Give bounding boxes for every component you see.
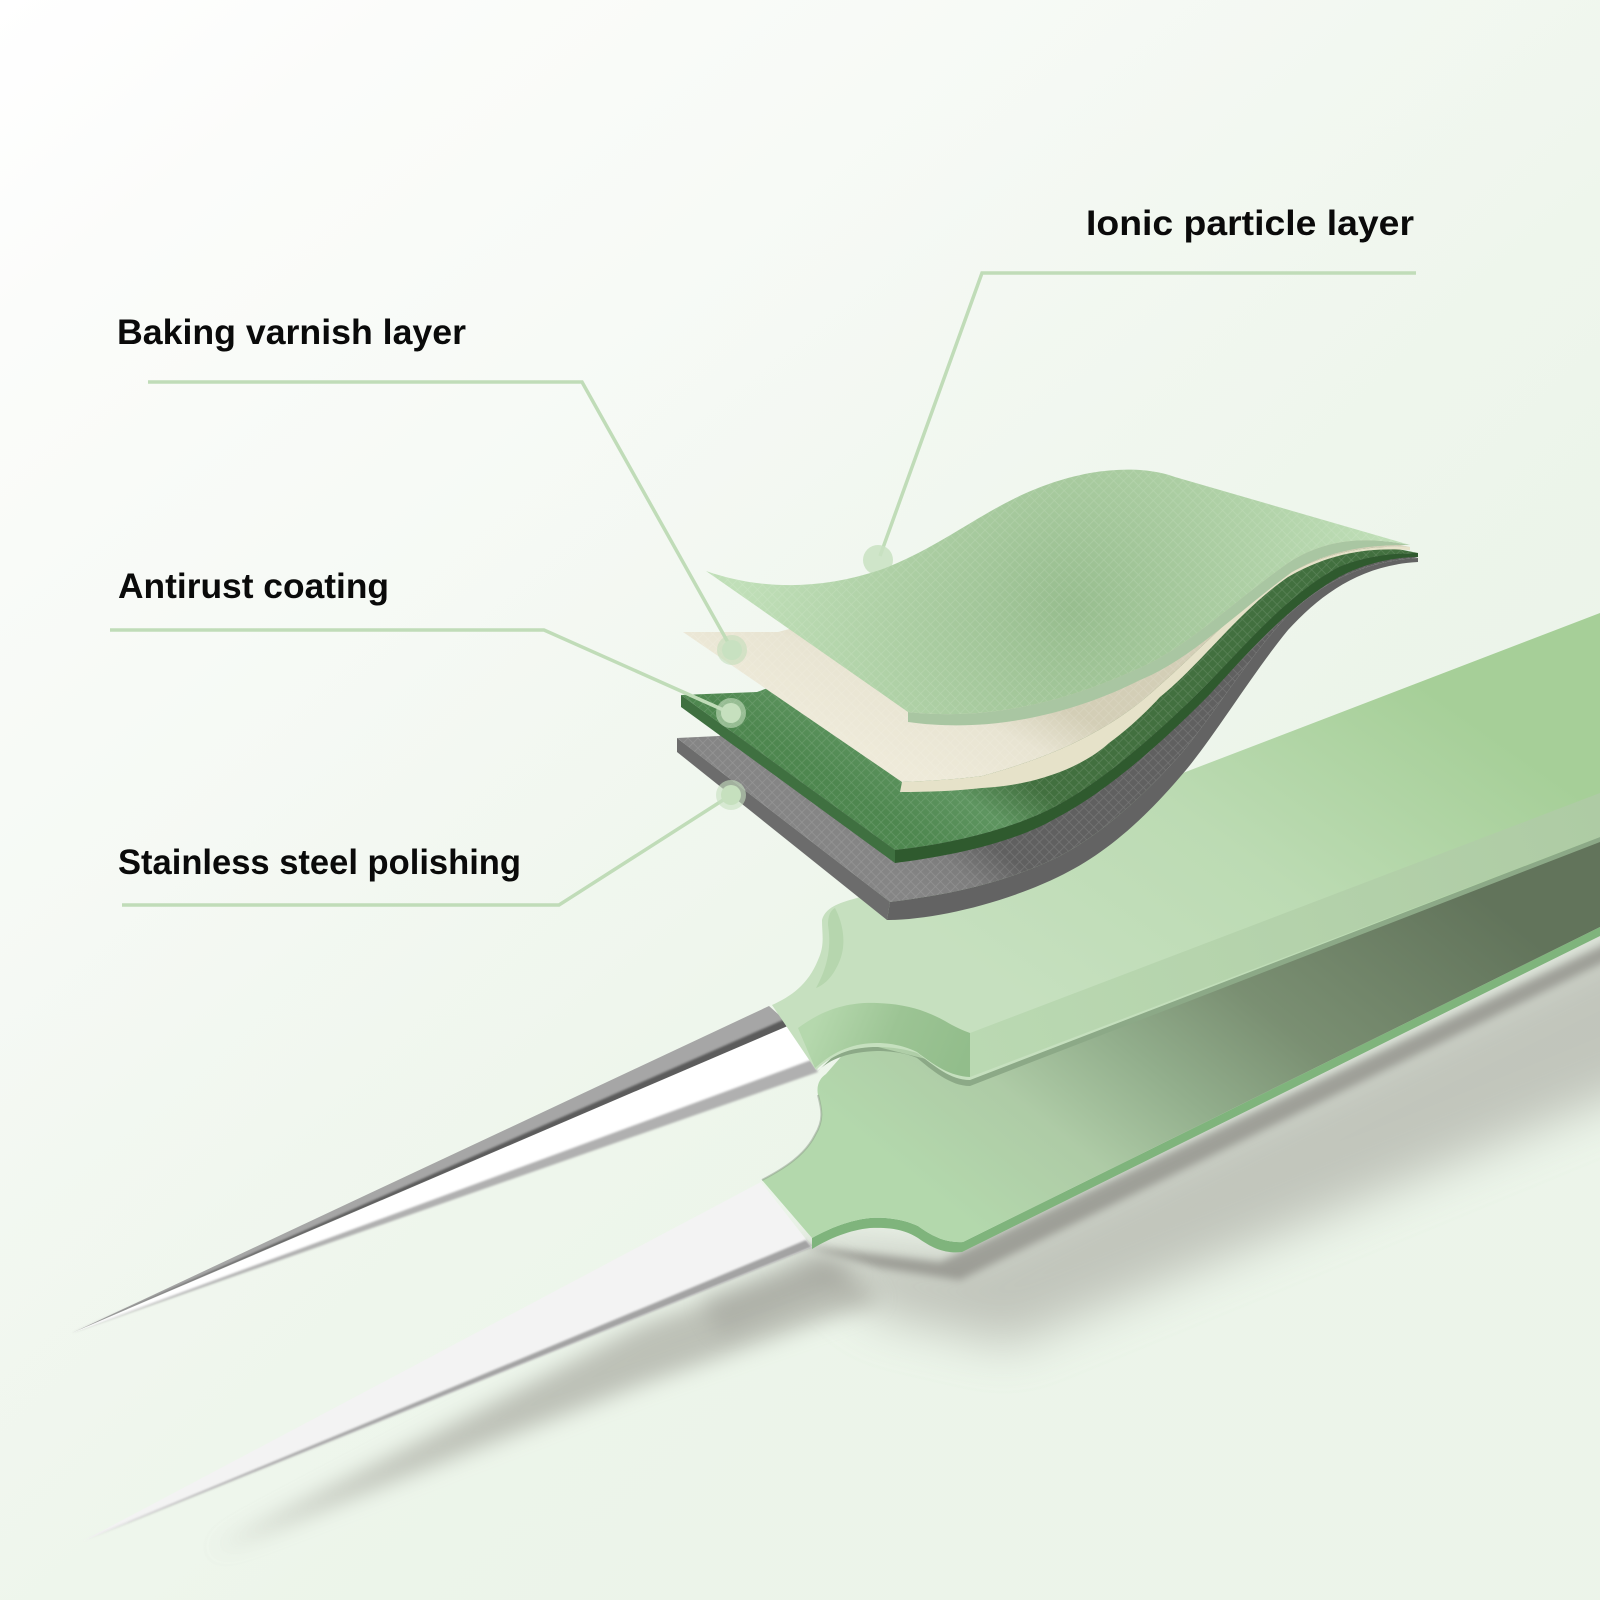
label: antirust coating: Antirust coating: [118, 567, 389, 606]
lower tweezer metal tip: [83, 1182, 812, 1541]
layer: ionic particle: [706, 470, 1410, 725]
callout line: ionic particle layer: [880, 273, 1416, 556]
layer: baking varnish: [683, 525, 1410, 792]
label: ionic particle layer: Ionic particle layer: [1086, 204, 1414, 243]
marker: baking varnish layer: [717, 635, 747, 665]
marker: ionic particle layer: [863, 545, 893, 575]
upper tweezer handle: [772, 613, 1600, 1086]
marker: antirust coating: [716, 698, 746, 728]
tweezer shadow: [212, 870, 1600, 1551]
label: baking varnish layer: Baking varnish layer: [117, 313, 466, 352]
lower tweezer handle: [762, 800, 1600, 1252]
layer: antirust coating: [681, 530, 1418, 863]
label: stainless steel polishing: Stainless steel polishing: [118, 843, 521, 882]
tweezers: [72, 613, 1600, 1541]
layer: stainless steel: [677, 530, 1418, 920]
callout lines: baking varnish, antirust, stainless: [110, 382, 731, 905]
recessed fillet: [798, 1003, 970, 1077]
upper tweezer metal tip: [72, 1006, 818, 1333]
layer stack: [677, 470, 1418, 920]
marker: stainless steel polishing: [716, 780, 746, 810]
